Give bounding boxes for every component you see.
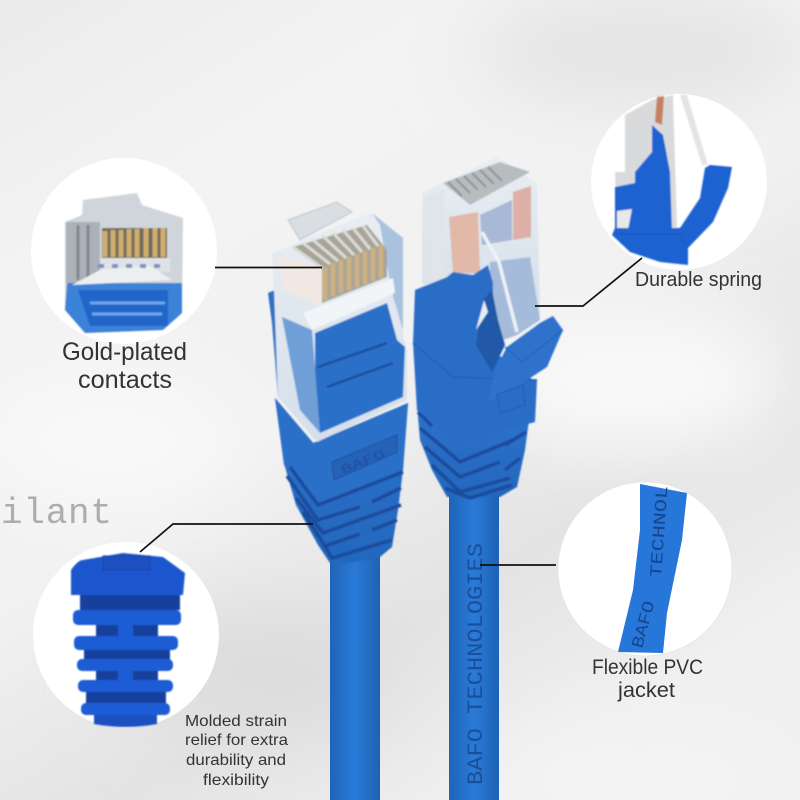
strain label xyxy=(185,713,288,789)
left clear block xyxy=(276,255,322,307)
icon: strain relief boot xyxy=(71,553,185,727)
left cable jacket xyxy=(330,550,380,800)
jacket circle xyxy=(558,482,732,656)
gold contact strips xyxy=(325,245,381,300)
right connector xyxy=(413,157,563,498)
back tab xyxy=(288,202,352,240)
gold label xyxy=(62,338,187,394)
icon: bent cable: BAFO xyxy=(629,599,660,651)
gold circle xyxy=(31,158,217,344)
left connector xyxy=(268,202,408,564)
strain label: relief for extra xyxy=(185,732,288,749)
latch xyxy=(488,316,563,402)
gold line xyxy=(215,266,322,268)
spring line xyxy=(535,258,642,306)
blue plug block xyxy=(413,265,537,443)
copper strips xyxy=(449,212,480,273)
icon: bent cable: TECHNOL xyxy=(648,485,673,578)
left blue wing xyxy=(268,290,315,437)
callout: flexible PVC jacket xyxy=(480,482,732,702)
icon: plug close-up xyxy=(65,193,183,333)
gold label: contacts xyxy=(78,366,172,394)
right cable jacket xyxy=(449,490,499,800)
partial background word: ilant xyxy=(1,493,112,534)
plug ledge xyxy=(303,278,395,330)
jacket label xyxy=(592,656,703,702)
callout: gold-plated contacts xyxy=(31,158,322,394)
latch hole shading xyxy=(476,290,505,372)
icon: latch side view xyxy=(612,95,732,265)
icon: bent cable xyxy=(618,484,687,653)
gold label: Gold-plated xyxy=(62,338,187,366)
cable print: BAFO TECHNOLOGIES xyxy=(464,543,489,785)
top contacts panel xyxy=(293,225,387,303)
jacket label: Flexible PVC xyxy=(592,656,703,679)
strain line xyxy=(140,524,313,552)
strain circle xyxy=(33,542,219,728)
jacket label: jacket xyxy=(617,679,675,702)
jacket line xyxy=(480,564,556,566)
strain label: Molded strain xyxy=(185,713,287,730)
strain label: durability and xyxy=(186,752,286,769)
strain label: flexibility xyxy=(203,772,269,789)
spring circle xyxy=(591,94,767,270)
contact ridge xyxy=(443,162,530,205)
right strain relief boot xyxy=(417,405,530,498)
clear plug body xyxy=(272,213,407,442)
blue interior xyxy=(315,303,405,433)
left strain relief boot xyxy=(275,398,408,564)
boot logo: BAFO xyxy=(339,446,387,478)
callout: molded strain relief xyxy=(33,524,313,789)
spring label: Durable spring xyxy=(635,269,762,291)
callout: durable spring xyxy=(535,94,767,306)
clear plug body right xyxy=(422,157,540,317)
spring arm xyxy=(490,257,540,345)
